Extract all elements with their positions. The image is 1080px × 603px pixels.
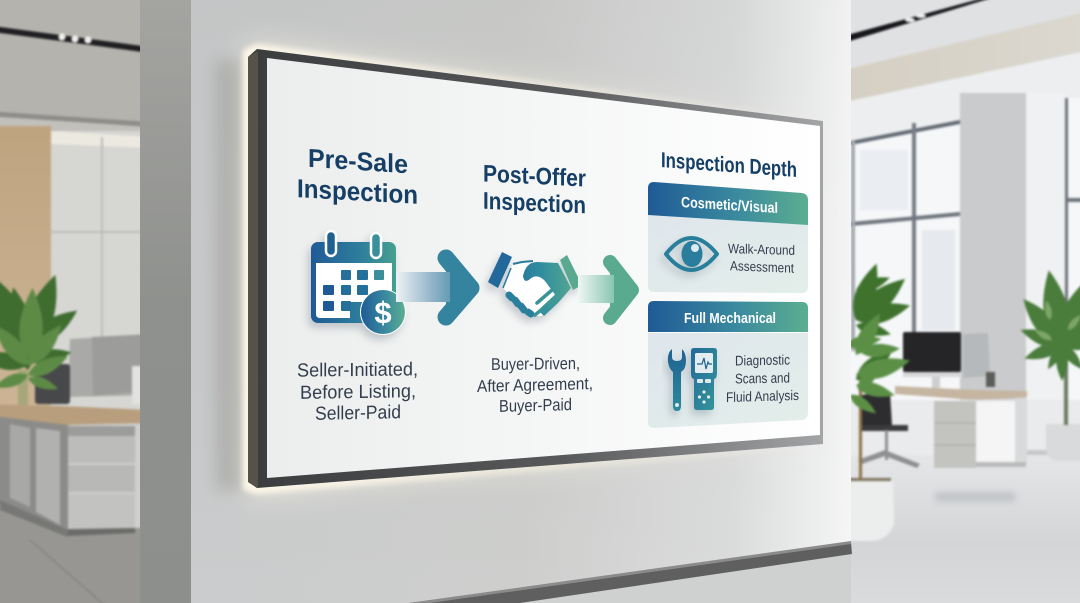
arrow: post-offer to inspection depth	[578, 262, 632, 318]
description: buyer-driven: Buyer-Paid	[499, 395, 572, 416]
pillar	[140, 0, 191, 603]
card body	[648, 333, 808, 428]
header label: Full Mechanical	[684, 310, 776, 327]
column: pre-sale inspection	[297, 143, 418, 425]
icon: calendar with dollar coin	[311, 231, 406, 335]
display screen	[267, 58, 820, 478]
label: diagnostic scans and fluid analysis: Scans and	[735, 369, 790, 387]
description: seller-initiated: Before Listing,	[300, 381, 416, 404]
left office background	[0, 0, 150, 603]
header label: Cosmetic/Visual	[681, 194, 778, 217]
description: buyer-driven	[477, 354, 593, 416]
card body	[648, 215, 808, 293]
column: inspection depth	[648, 148, 808, 428]
description: seller-initiated: Seller-Paid	[315, 402, 401, 425]
icon: eye	[666, 238, 717, 270]
hand with thumb and wrist	[523, 262, 571, 316]
description: buyer-driven: Buyer-Driven,	[491, 354, 580, 374]
heading: Inspection Depth: Inspection Depth	[661, 148, 797, 182]
plant left	[859, 380, 862, 480]
back desk	[858, 332, 1027, 468]
label: diagnostic scans and fluid analysis: Fluid Analysis	[726, 387, 799, 405]
icon: calendar with dollar coin: $	[374, 295, 392, 330]
card header	[648, 182, 808, 225]
plant right	[1064, 370, 1068, 425]
heading: Post-Offer Inspection	[483, 160, 586, 219]
column: post-offer inspection	[477, 160, 593, 416]
label: walk-around assessment: Assessment	[730, 258, 794, 276]
heading: Pre-Sale Inspection	[297, 143, 418, 210]
right office background	[840, 0, 1080, 603]
description: seller-initiated	[297, 359, 418, 425]
icon: diagnostic scanner	[691, 348, 717, 410]
panel: cosmetic/visual	[648, 182, 808, 293]
left plant	[0, 270, 83, 394]
arrow: pre-sale to post-offer	[396, 258, 471, 317]
heading: Post-Offer Inspection: Post-Offer	[483, 160, 586, 193]
display frame	[248, 49, 823, 488]
panel: full mechanical	[648, 301, 808, 428]
pot right	[1046, 424, 1080, 461]
description: seller-initiated: Seller-Initiated,	[297, 359, 418, 382]
plant pot	[840, 480, 894, 541]
icon: handshake	[488, 252, 582, 316]
heading: Pre-Sale Inspection: Pre-Sale	[308, 143, 408, 179]
feature wall	[191, 0, 851, 603]
display backlight and wall shadow	[216, 42, 825, 496]
description: buyer-driven: After Agreement,	[477, 374, 593, 396]
heading: Post-Offer Inspection: Inspection	[483, 188, 586, 219]
baseboard	[409, 541, 852, 603]
icon: wrench	[668, 349, 686, 411]
card header	[648, 301, 808, 332]
label: diagnostic scans and fluid analysis: Diagnostic	[735, 351, 790, 369]
label: walk-around assessment: Walk-Around	[728, 241, 795, 258]
label: diagnostic scans and fluid analysis	[726, 351, 799, 405]
label: walk-around assessment	[728, 241, 795, 276]
heading: Pre-Sale Inspection: Inspection	[297, 173, 418, 210]
